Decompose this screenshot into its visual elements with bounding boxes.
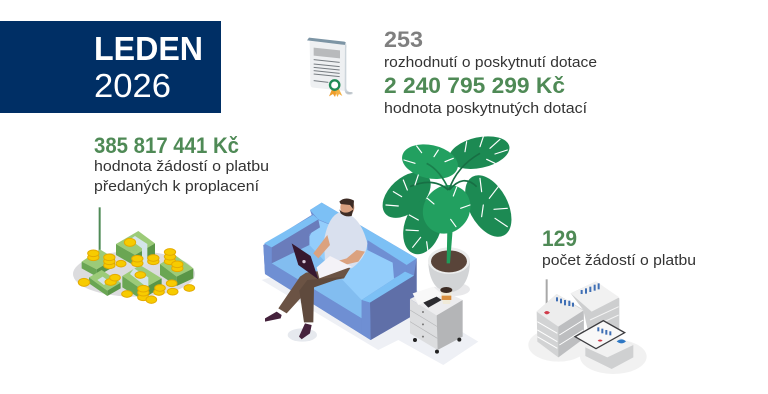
title banner: LEDEN: [94, 30, 203, 67]
stat: payments handed over: předaných k proplacení: [94, 178, 260, 195]
title banner: [0, 21, 221, 113]
stat: decisions: 2 240 795 299 Kč: [384, 73, 565, 98]
stat: payment requests: počet žádostí o platbu: [542, 252, 696, 269]
man: [265, 199, 367, 339]
stat: decisions: hodnota poskytnutých dotací: [384, 100, 588, 117]
stat: payment requests: [542, 226, 696, 269]
sofa: [263, 203, 417, 340]
icon: money and coins: [73, 207, 195, 303]
stat: decisions: rozhodnutí o poskytnutí dotace: [384, 54, 597, 71]
plant pot: [428, 230, 470, 296]
title banner: 2026: [94, 67, 171, 104]
plant leaves: [374, 131, 521, 259]
icon: stacks of paper and tablet: [528, 279, 647, 374]
floor shadow: [262, 263, 478, 365]
stat: decisions: 253: [384, 27, 423, 52]
stat: payments handed over: [94, 133, 269, 195]
stat: decisions: [384, 27, 597, 117]
icon: certificate: [307, 38, 353, 97]
stat: payments handed over: hodnota žádostí o platbu: [94, 158, 269, 175]
illustration: man on sofa with plant: [262, 131, 521, 365]
stat: payment requests: 129: [542, 226, 577, 251]
stat: payments handed over: 385 817 441 Kč: [94, 133, 239, 158]
side table with coffee and notes: [410, 287, 463, 354]
